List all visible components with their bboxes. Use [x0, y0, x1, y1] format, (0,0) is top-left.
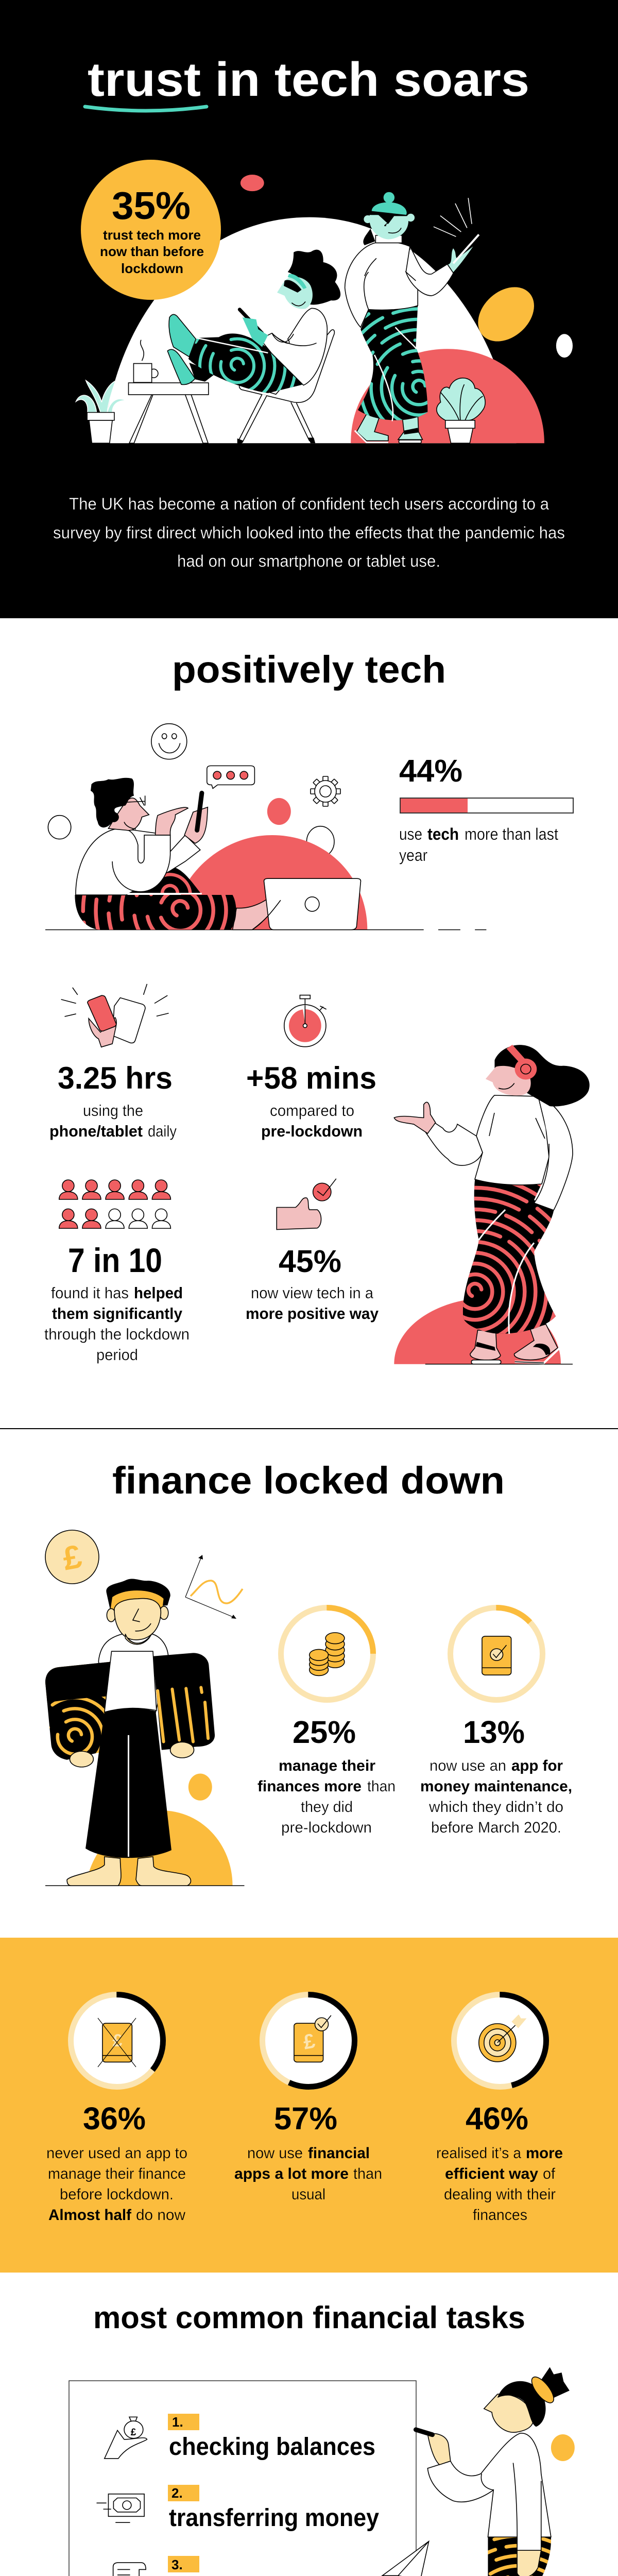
stat: 57%: 57% [274, 2101, 337, 2136]
figure [413, 2367, 570, 2576]
yellow dome [87, 1811, 233, 1886]
callout: 35%: lockdown [121, 261, 183, 276]
stat: 7 in 10: period [96, 1346, 138, 1364]
illustration: man with folded arms [45, 1579, 244, 1886]
stat: 45%: more positive way [246, 1304, 379, 1323]
stat: 7 in 10: found it has [51, 1284, 129, 1302]
ring: 57% finance app: £ [302, 2029, 317, 2054]
plant right [437, 378, 485, 443]
icon: thumbs up with tick [277, 1179, 336, 1230]
intro paragraph [53, 495, 565, 570]
horizon line [45, 929, 486, 930]
task 1: 1. [172, 2414, 183, 2430]
icon: speech bubble [207, 766, 254, 788]
red blob [267, 798, 291, 825]
stat: 7 in 10: 7 in 10 [68, 1241, 162, 1279]
icon: stopwatch [284, 995, 327, 1047]
hero illustration [75, 175, 573, 443]
stat: 36%: 36% [83, 2101, 146, 2136]
plant left [76, 381, 126, 443]
task 1 [168, 2414, 375, 2461]
icon: phone and tablet [61, 984, 169, 1047]
panel: task board [69, 2381, 416, 2576]
stat: 13%: which they didn’t do [428, 1799, 563, 1816]
stat: 25%: pre-lockdown [281, 1819, 372, 1836]
stat: 36%: before lockdown. [60, 2186, 174, 2203]
stat: 13%: 13% [463, 1715, 525, 1750]
head and hand [394, 1045, 590, 1133]
stat: 7 in 10: helped [134, 1284, 183, 1302]
stat: 13%: money maintenance, [420, 1778, 572, 1795]
icon: receipt [113, 2563, 146, 2576]
stat: 44%: use [399, 825, 422, 843]
section background: hero [0, 0, 618, 618]
icon: pound coin: £ [60, 1537, 84, 1578]
seated woman [167, 249, 341, 443]
stat: 45%: now view tech in a [251, 1284, 374, 1302]
task 2 [168, 2485, 379, 2532]
intro paragraph: The UK has become a nation of confident tech users according to a [69, 495, 549, 513]
stat: +58 mins: +58 mins [246, 1061, 376, 1095]
stat: 46% [436, 2101, 563, 2224]
stat: 44%: year [399, 846, 427, 865]
heading: positively tech: positively tech [172, 648, 446, 691]
title: trust in tech soars [88, 53, 529, 106]
stat: +58 mins [246, 1061, 376, 1140]
table with mug [128, 340, 209, 443]
stat: 44%: 44% [399, 753, 462, 788]
stat: 25%: 25% [293, 1715, 356, 1750]
standing woman [344, 192, 480, 443]
stat: 46%: more [526, 2145, 563, 2162]
icon: smiley [151, 724, 187, 759]
stat: 13%: now use an [430, 1757, 506, 1774]
stat: 7 in 10 [44, 1241, 190, 1364]
red blob [241, 175, 264, 191]
stat: 25%: than [367, 1778, 396, 1795]
yellow blob [467, 276, 545, 352]
ring: 36% no app: £ [113, 2031, 123, 2050]
red semicircle [351, 349, 544, 443]
chart axes and trend line [185, 1555, 243, 1619]
red dome and ground [394, 1180, 573, 1364]
ring: 36% no app [71, 1995, 163, 2087]
progress bar [400, 798, 573, 813]
heading: most common financial tasks: most common financial tasks [93, 2300, 525, 2335]
stat: 3.25 hrs: daily [148, 1122, 177, 1140]
task 2: transferring money [169, 2504, 379, 2532]
stat: 44%: more than last [465, 825, 558, 843]
stat: 44%: tech [427, 825, 459, 843]
stat: 45% [246, 1244, 379, 1323]
stat: 3.25 hrs [49, 1061, 177, 1140]
stat: 25%: finances more [258, 1778, 362, 1795]
divider [0, 1428, 618, 1429]
stat: 46%: efficient way [445, 2165, 538, 2182]
icon: pound coin [45, 1530, 99, 1584]
intro paragraph: had on our smartphone or tablet use. [177, 552, 440, 570]
white dome [104, 217, 517, 443]
stat: 46%: of [543, 2165, 556, 2182]
heading: finance locked down: finance locked down [112, 1459, 505, 1502]
intro paragraph: survey by first direct which looked into the effects that the pandemic has [53, 523, 565, 542]
stat: 36%: do now [136, 2207, 185, 2224]
icon: hand with money bag: £ [131, 2427, 136, 2438]
illustration: woman at board [381, 2367, 575, 2576]
task 1: checking balances [169, 2433, 375, 2461]
seated man [75, 778, 236, 930]
stat: 57%: financial [308, 2145, 370, 2162]
illustration: woman with headphones [393, 1045, 590, 1364]
section background: positively tech and finance [0, 618, 618, 1938]
icon: people 7 in 10 [59, 1180, 170, 1228]
callout: 35% [81, 160, 221, 300]
stat: +58 mins: pre-lockdown [261, 1122, 363, 1140]
section background: yellow band [0, 1938, 618, 2273]
task 3 [168, 2556, 293, 2576]
foot [233, 889, 284, 930]
figure [45, 1579, 215, 1886]
stat: 36%: never used an app to [46, 2145, 187, 2162]
ring: 57% finance app [263, 1995, 354, 2087]
stat: 57%: usual [291, 2186, 325, 2203]
stat: 3.25 hrs: 3.25 hrs [58, 1061, 173, 1095]
stat: +58 mins: compared to [270, 1101, 354, 1120]
yellow blob [188, 1773, 212, 1801]
task 3: 3. [171, 2557, 183, 2572]
stat: 57%: than [353, 2165, 382, 2182]
stat: 13%: before March 2020. [431, 1819, 561, 1836]
outline circle [48, 816, 71, 839]
stat: 46%: 46% [466, 2101, 528, 2136]
stat: 36%: manage their finance [48, 2165, 186, 2182]
ring: 25% coins [281, 1607, 373, 1700]
stat: 25%: manage their [279, 1757, 375, 1774]
icon: banknote [96, 2494, 144, 2522]
paper plane [382, 2541, 429, 2576]
stat: 36%: Almost half [48, 2207, 132, 2224]
stat: 46%: realised it’s a [436, 2145, 521, 2162]
stat: 3.25 hrs: using the [83, 1101, 143, 1120]
stat: 13% [420, 1715, 572, 1836]
stat: 57%: now use [247, 2145, 303, 2162]
icon: hand with money bag [105, 2417, 147, 2459]
stat: 44% [399, 753, 573, 865]
callout: 35%: 35% [112, 184, 191, 227]
stat: 25%: they did [301, 1799, 353, 1816]
sweater [425, 1095, 573, 1210]
stat: 7 in 10: through the lockdown [44, 1325, 190, 1343]
icon: gear [311, 776, 340, 806]
stat: 57% [234, 2101, 382, 2203]
yellow blob [551, 2434, 575, 2461]
stat: 7 in 10: them significantly [52, 1304, 183, 1323]
stat: 57%: apps a lot more [234, 2165, 349, 2182]
stat: 25% [258, 1715, 396, 1836]
stat: 46%: finances [473, 2207, 527, 2224]
task 2: 2. [171, 2485, 183, 2501]
laptop [264, 878, 360, 930]
red dome [174, 835, 367, 930]
illustration: man with phone and laptop [45, 723, 486, 930]
stat: 3.25 hrs: phone/tablet [49, 1122, 143, 1140]
stat: 46%: dealing with their [444, 2186, 556, 2203]
white blob [556, 334, 573, 358]
ring: 13% phone [450, 1607, 543, 1700]
ring: 46% target [454, 1995, 546, 2087]
ground [45, 1885, 244, 1886]
stat: 13%: app for [511, 1757, 563, 1774]
stat: 36% [46, 2101, 187, 2224]
stat: 45%: 45% [279, 1244, 341, 1279]
callout: 35%: trust tech more [103, 227, 201, 243]
callout: 35%: now than before [100, 244, 204, 259]
title underline [85, 107, 207, 111]
